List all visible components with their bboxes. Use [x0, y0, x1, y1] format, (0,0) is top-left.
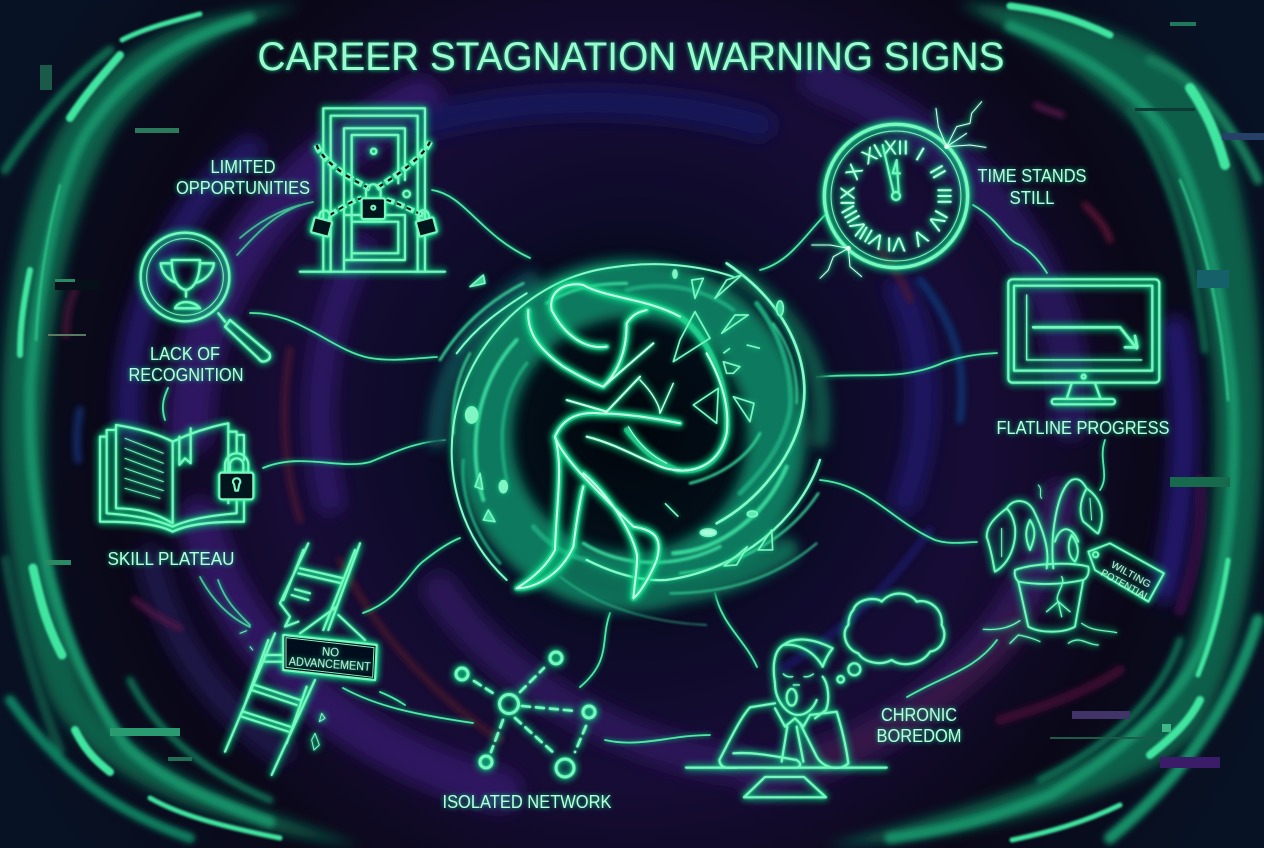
- label: limited opportunities: [176, 156, 310, 198]
- label: lack of recognition: LACK OF: [150, 343, 220, 364]
- icon: wilting plant: [983, 479, 1164, 645]
- central vortex: [437, 263, 822, 625]
- icon: stopped clock: II: [925, 161, 950, 183]
- label: time stands still: STILL: [1010, 187, 1054, 208]
- label: wilting potential tag: POTENTIAL: [1099, 567, 1152, 604]
- label: no advancement sign: ADVANCEMENT: [288, 656, 371, 674]
- label: lack of recognition: RECOGNITION: [128, 364, 244, 385]
- icon: broken ladder with sign: [225, 543, 377, 775]
- label: chronic boredom: CHRONIC: [881, 704, 957, 725]
- icon: stopped clock: V: [908, 224, 932, 251]
- icon: isolated network: [456, 652, 595, 777]
- icon: stopped clock: VI: [886, 232, 906, 255]
- icon: stopped clock: VIII: [837, 201, 872, 239]
- icon: stopped clock: XI: [858, 140, 886, 169]
- icon: stopped clock: III: [932, 187, 955, 205]
- label: lack of recognition: [128, 343, 244, 385]
- icon: monitor flatline: [1008, 279, 1159, 404]
- icon: stopped clock: [812, 102, 986, 278]
- icon: stopped clock: X: [841, 160, 868, 184]
- label: no advancement sign: [288, 644, 372, 674]
- label: chronic boredom: BOREDOM: [876, 725, 962, 746]
- icon: stopped clock: XII: [883, 137, 909, 160]
- icon: locked book: [100, 423, 253, 532]
- label: no advancement sign: NO: [321, 646, 340, 660]
- label: flatline progress: FLATLINE PROGRESS: [996, 417, 1170, 438]
- label: limited opportunities: LIMITED: [210, 156, 276, 177]
- label: isolated network: ISOLATED NETWORK: [442, 791, 612, 812]
- label: time stands still: [978, 165, 1086, 208]
- connector lines: [163, 190, 1105, 743]
- icon: chained door: [300, 108, 445, 272]
- label: limited opportunities: OPPORTUNITIES: [176, 177, 310, 198]
- curled figure: [517, 284, 727, 598]
- icon: stopped clock: I: [912, 143, 928, 166]
- icon: magnifier with trophy: [141, 233, 270, 362]
- glass shards: [466, 270, 783, 566]
- label: chronic boredom: [876, 704, 962, 746]
- label: time stands still: TIME STANDS: [978, 165, 1086, 186]
- title: CAREER STAGNATION WARNING SIGNS: [258, 35, 1004, 79]
- icon: stopped clock: VII: [855, 221, 889, 254]
- icon: stopped clock: IX: [837, 186, 860, 206]
- icon: bored person with thought cloud: [686, 594, 944, 797]
- label: skill plateau: SKILL PLATEAU: [108, 548, 234, 569]
- label: wilting potential tag: WILTING: [1109, 559, 1153, 591]
- icon: stopped clock: IV: [922, 206, 952, 234]
